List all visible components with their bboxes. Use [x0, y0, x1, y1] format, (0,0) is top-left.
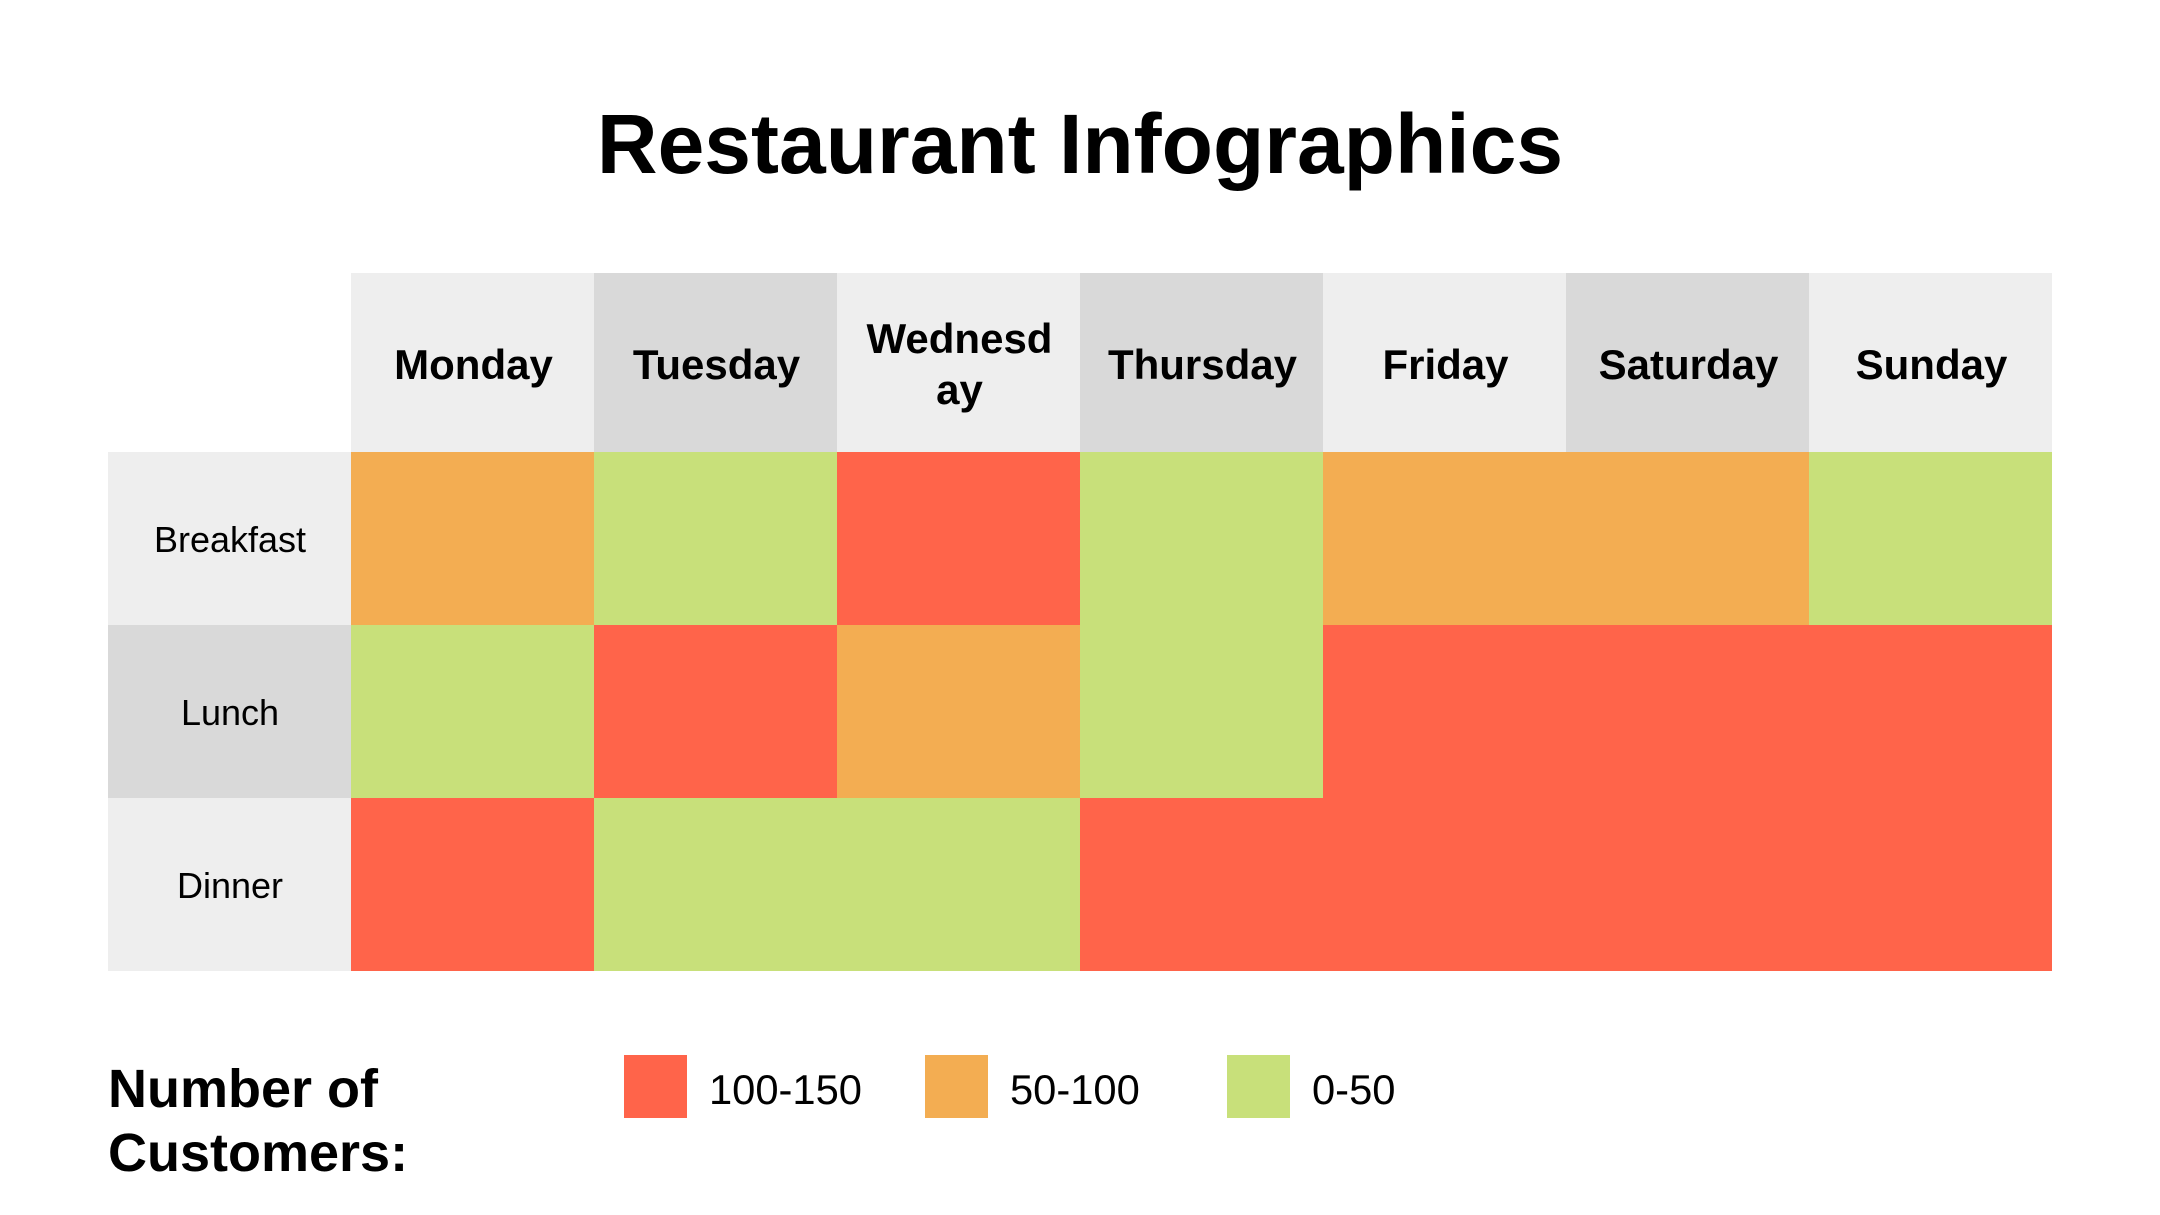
column header: Saturday: [1566, 273, 1809, 452]
legend heading: Customers:: [108, 1123, 408, 1183]
legend label: 50-100: 50-100: [1010, 1066, 1140, 1113]
cell: Breakfast Friday 50-100: [1323, 452, 1566, 625]
heatmap table: [108, 273, 2052, 971]
legend label: 100-150: 100-150: [709, 1066, 862, 1113]
cell: Dinner Thursday 100-150: [1080, 798, 1323, 971]
cell: Dinner Wednesday 0-50: [837, 798, 1080, 971]
row header: Breakfast: Breakfast: [154, 519, 306, 560]
column header: Saturday: Saturday: [1599, 340, 1778, 388]
cell: Dinner Friday 100-150: [1323, 798, 1566, 971]
legend swatch: 50-100: [925, 1055, 988, 1118]
legend heading: [108, 1059, 408, 1183]
legend heading: Number of: [108, 1059, 378, 1119]
title: Restaurant Infographics: [597, 97, 1563, 191]
cell: Lunch Monday 0-50: [351, 625, 594, 798]
cell: Breakfast Sunday 0-50: [1809, 452, 2052, 625]
column header: Friday: Friday: [1382, 340, 1509, 388]
column header: Monday: Monday: [394, 340, 553, 388]
cell: Lunch Sunday 100-150: [1809, 625, 2052, 798]
row header: Lunch: Lunch: [181, 692, 279, 733]
cell: Dinner Monday 100-150: [351, 798, 594, 971]
column header: Wednesday: [837, 273, 1080, 452]
column header: Thursday: Thursday: [1108, 340, 1297, 388]
legend swatch: 100-150: [624, 1055, 687, 1118]
legend: [624, 1055, 1395, 1118]
cell: Lunch Saturday 100-150: [1566, 625, 1809, 798]
row header: Dinner: Dinner: [177, 865, 283, 906]
cell: Lunch Thursday 0-50: [1080, 625, 1323, 798]
column header: Monday: [351, 273, 594, 452]
cell: Dinner Sunday 100-150: [1809, 798, 2052, 971]
column header: Thursday: [1080, 273, 1323, 452]
cell: Dinner Tuesday 0-50: [594, 798, 837, 971]
cell: Breakfast Saturday 50-100: [1566, 452, 1809, 625]
column header: Tuesday: Tuesday: [633, 340, 800, 388]
column header: Sunday: Sunday: [1856, 340, 2007, 388]
cell: Breakfast Tuesday 0-50: [594, 452, 837, 625]
legend swatch: 0-50: [1227, 1055, 1290, 1118]
column header: Friday: [1323, 273, 1566, 452]
cell: Breakfast Thursday 0-50: [1080, 452, 1323, 625]
legend label: 0-50: 0-50: [1312, 1066, 1395, 1113]
row header: Dinner: [108, 798, 351, 971]
row header: Lunch: [108, 625, 351, 798]
cell: Breakfast Monday 50-100: [351, 452, 594, 625]
cell: Lunch Friday 100-150: [1323, 625, 1566, 798]
cell: Lunch Wednesday 50-100: [837, 625, 1080, 798]
column header: Tuesday: [594, 273, 837, 452]
cell: Breakfast Wednesday 100-150: [837, 452, 1080, 625]
column header: Wednesday: ay: [936, 366, 983, 413]
cell: Lunch Tuesday 100-150: [594, 625, 837, 798]
cell: Dinner Saturday 100-150: [1566, 798, 1809, 971]
column header: Wednesday: Wednesd: [867, 315, 1052, 362]
row header: Breakfast: [108, 452, 351, 625]
column header: Sunday: [1809, 273, 2052, 452]
